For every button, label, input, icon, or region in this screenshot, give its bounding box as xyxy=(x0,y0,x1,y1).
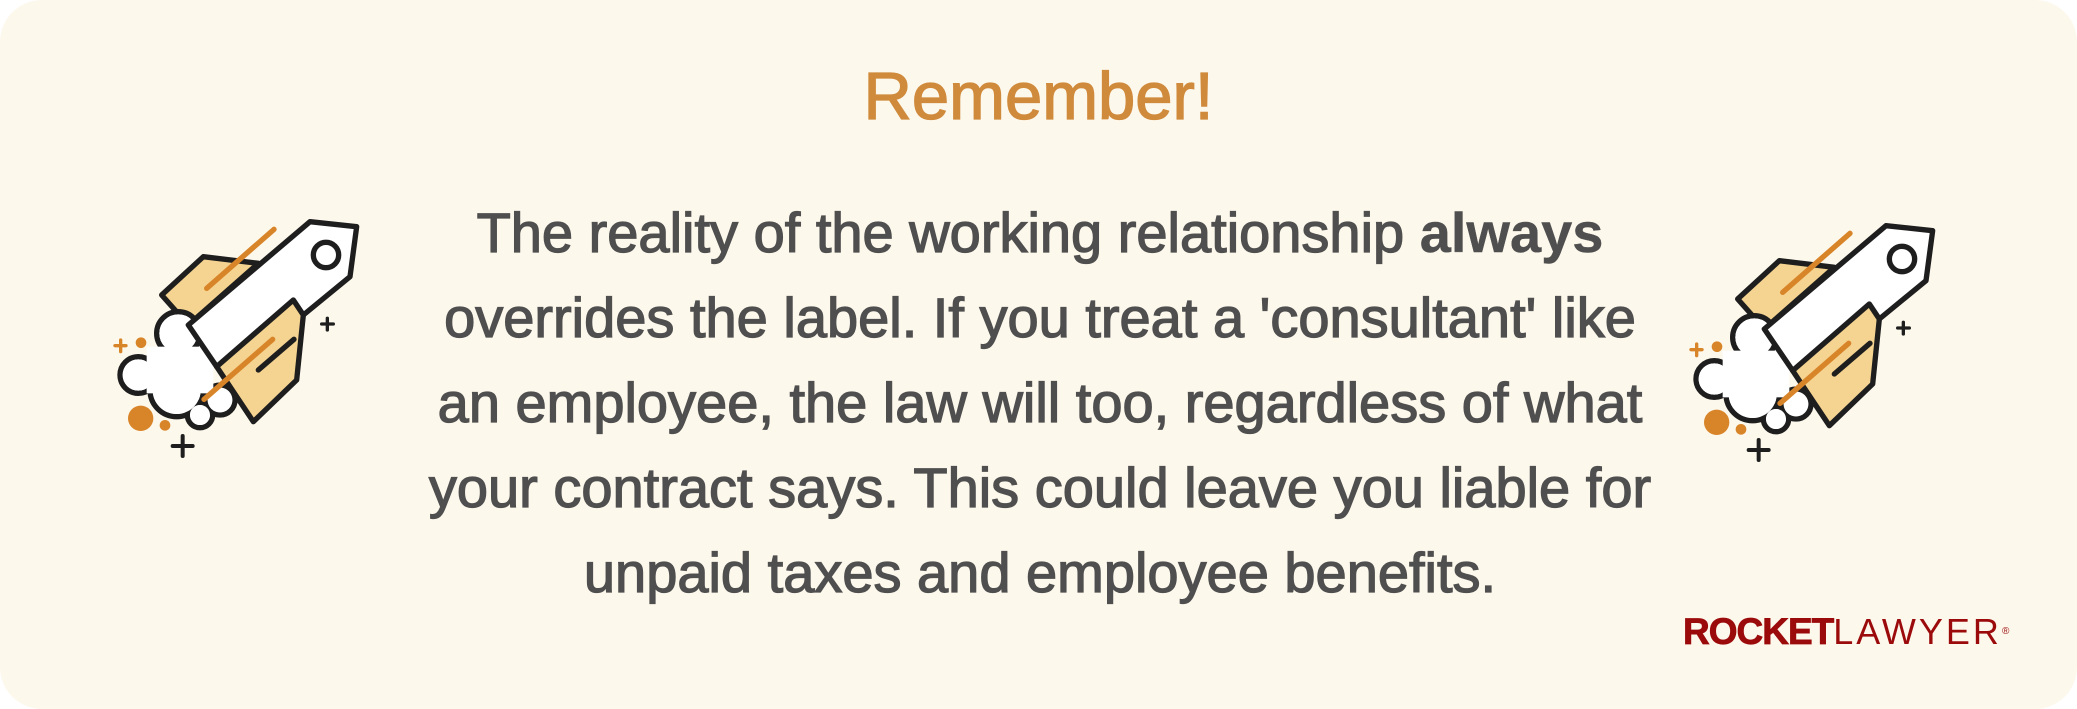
body text xyxy=(428,201,1651,604)
title: Remember! xyxy=(864,59,1213,134)
logo: ROCKETLAWYER® xyxy=(1683,611,2009,652)
body text: The reality of the working relationship always xyxy=(477,201,1603,264)
body text: overrides the label. If you treat a 'consultant' like xyxy=(444,286,1636,349)
icon: rocket left xyxy=(113,219,360,458)
body text: unpaid taxes and employee benefits. xyxy=(584,541,1496,604)
icon: rocket right xyxy=(1689,223,1936,462)
body text: your contract says. This could leave you liable for xyxy=(429,456,1651,519)
body text: an employee, the law will too, regardless of what xyxy=(438,371,1642,434)
